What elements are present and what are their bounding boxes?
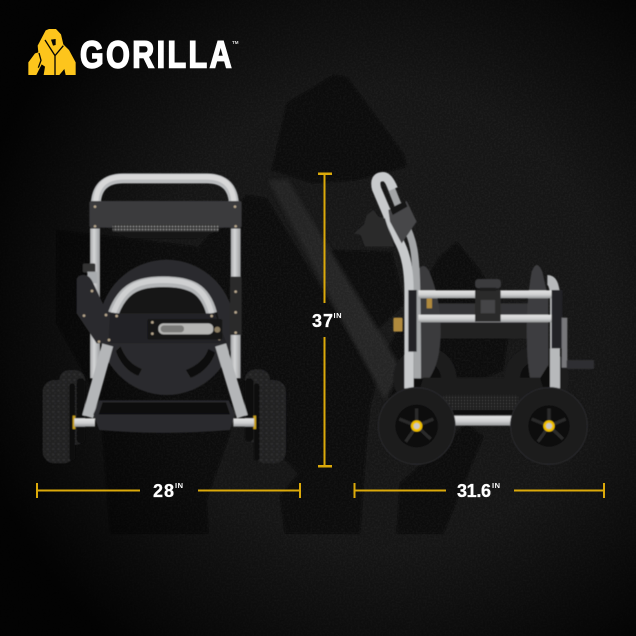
- frame tubes: [88, 177, 242, 417]
- icon: gorilla: [28, 29, 76, 75]
- rear wheels: [393, 346, 569, 411]
- dimension: height 37 in: [312, 172, 342, 468]
- frame tubes: [376, 177, 555, 388]
- bottom tray and axles: [74, 400, 254, 433]
- wheels: [43, 369, 286, 463]
- trademark: TM: [232, 40, 239, 45]
- front wheels: [378, 388, 587, 464]
- handle shelf: [89, 201, 242, 238]
- side brackets: [77, 263, 242, 343]
- bottom tray: [420, 378, 543, 426]
- hose reel: [99, 260, 234, 395]
- background light strip: [268, 180, 402, 400]
- dimension: depth 31.6 in: 31.6: [457, 481, 491, 501]
- cross bars and brackets: [408, 279, 594, 369]
- dimension: depth 31.6 in: [354, 481, 605, 501]
- handle clamp holders: [354, 201, 417, 247]
- dimension: width 28 in: 28: [153, 481, 175, 501]
- dimension: width 28 in: IN: [175, 481, 184, 490]
- dimension: depth 31.6 in: IN: [492, 481, 500, 490]
- dimension: width 28 in: [36, 481, 301, 501]
- product: hose cart side view: [354, 177, 594, 464]
- dimension: height 37 in: 37: [312, 311, 334, 331]
- reel drum and flanges: [417, 265, 548, 378]
- crank handle: [147, 319, 222, 340]
- wordmark: GORILLA: [80, 34, 234, 76]
- logo: Gorilla brand: [28, 29, 239, 76]
- product: hose cart front view: [43, 177, 286, 463]
- brass fittings: [393, 298, 432, 332]
- dimension: height 37 in: IN: [334, 311, 342, 320]
- background gorilla silhouette: [57, 75, 510, 533]
